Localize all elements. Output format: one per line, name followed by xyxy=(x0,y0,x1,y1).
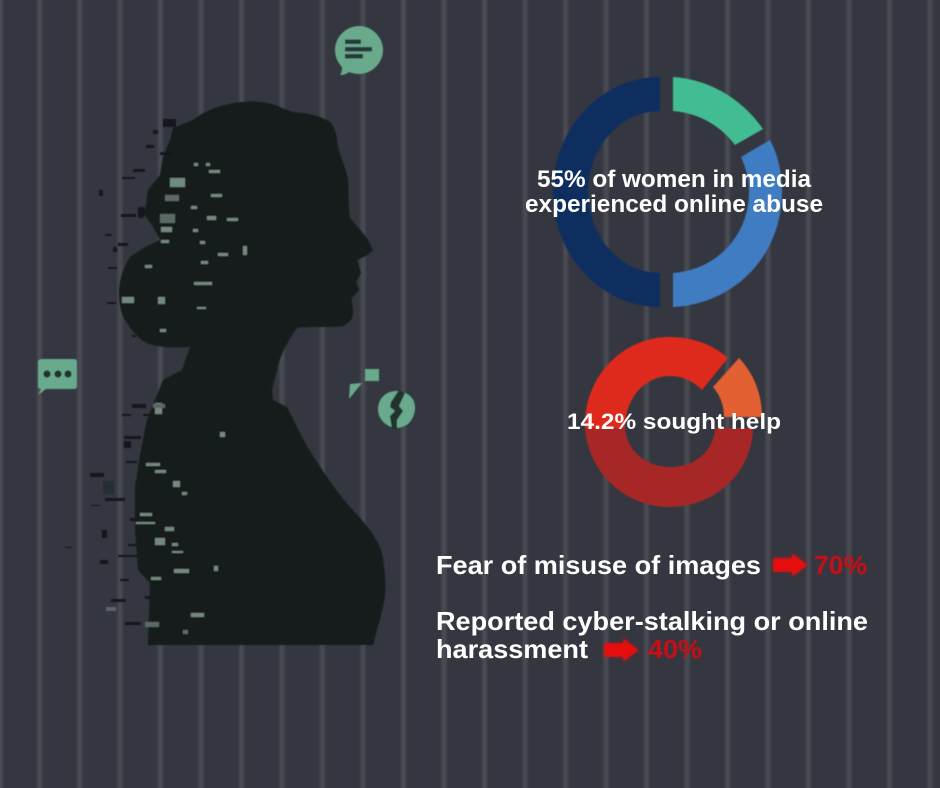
donut chart: 14.2% sought help xyxy=(585,337,762,507)
segment: blue xyxy=(673,140,782,307)
woman profile shape xyxy=(119,101,385,645)
statistic: cyber-stalking or harassment 40% xyxy=(436,606,868,664)
donut chart: 55% of women in media xyxy=(553,77,782,307)
icon: broken heart circle with pixel shards xyxy=(349,369,415,429)
donut label xyxy=(525,166,823,218)
segment: dark blue xyxy=(553,77,660,307)
donut label: experienced online abuse xyxy=(525,191,823,218)
arrow xyxy=(773,553,808,577)
icon: chat bubble with text lines xyxy=(335,26,383,75)
segment: bright red xyxy=(585,337,728,428)
statement: harassment xyxy=(436,634,588,664)
silhouette of a woman dissolving into fragments xyxy=(65,101,385,645)
arrow xyxy=(604,638,639,662)
segment: green xyxy=(673,77,763,145)
segment: orange xyxy=(713,358,762,417)
donut label: 14.2% sought help xyxy=(567,409,781,434)
statement: Fear of misuse of images xyxy=(436,550,761,580)
statement: Reported cyber-stalking or online xyxy=(436,606,868,636)
dark pixel fragments drifting away to the left xyxy=(65,119,176,625)
statistic: fear of misuse of images 70% xyxy=(436,550,867,580)
segment: dark red xyxy=(585,428,753,507)
donut label: 55% of women in media xyxy=(537,166,812,193)
icon: speech bubble with three dots xyxy=(38,359,77,395)
value: 40% xyxy=(648,634,702,664)
pale pixel fragments inside the silhouette xyxy=(106,163,247,634)
value: 70% xyxy=(814,550,867,580)
